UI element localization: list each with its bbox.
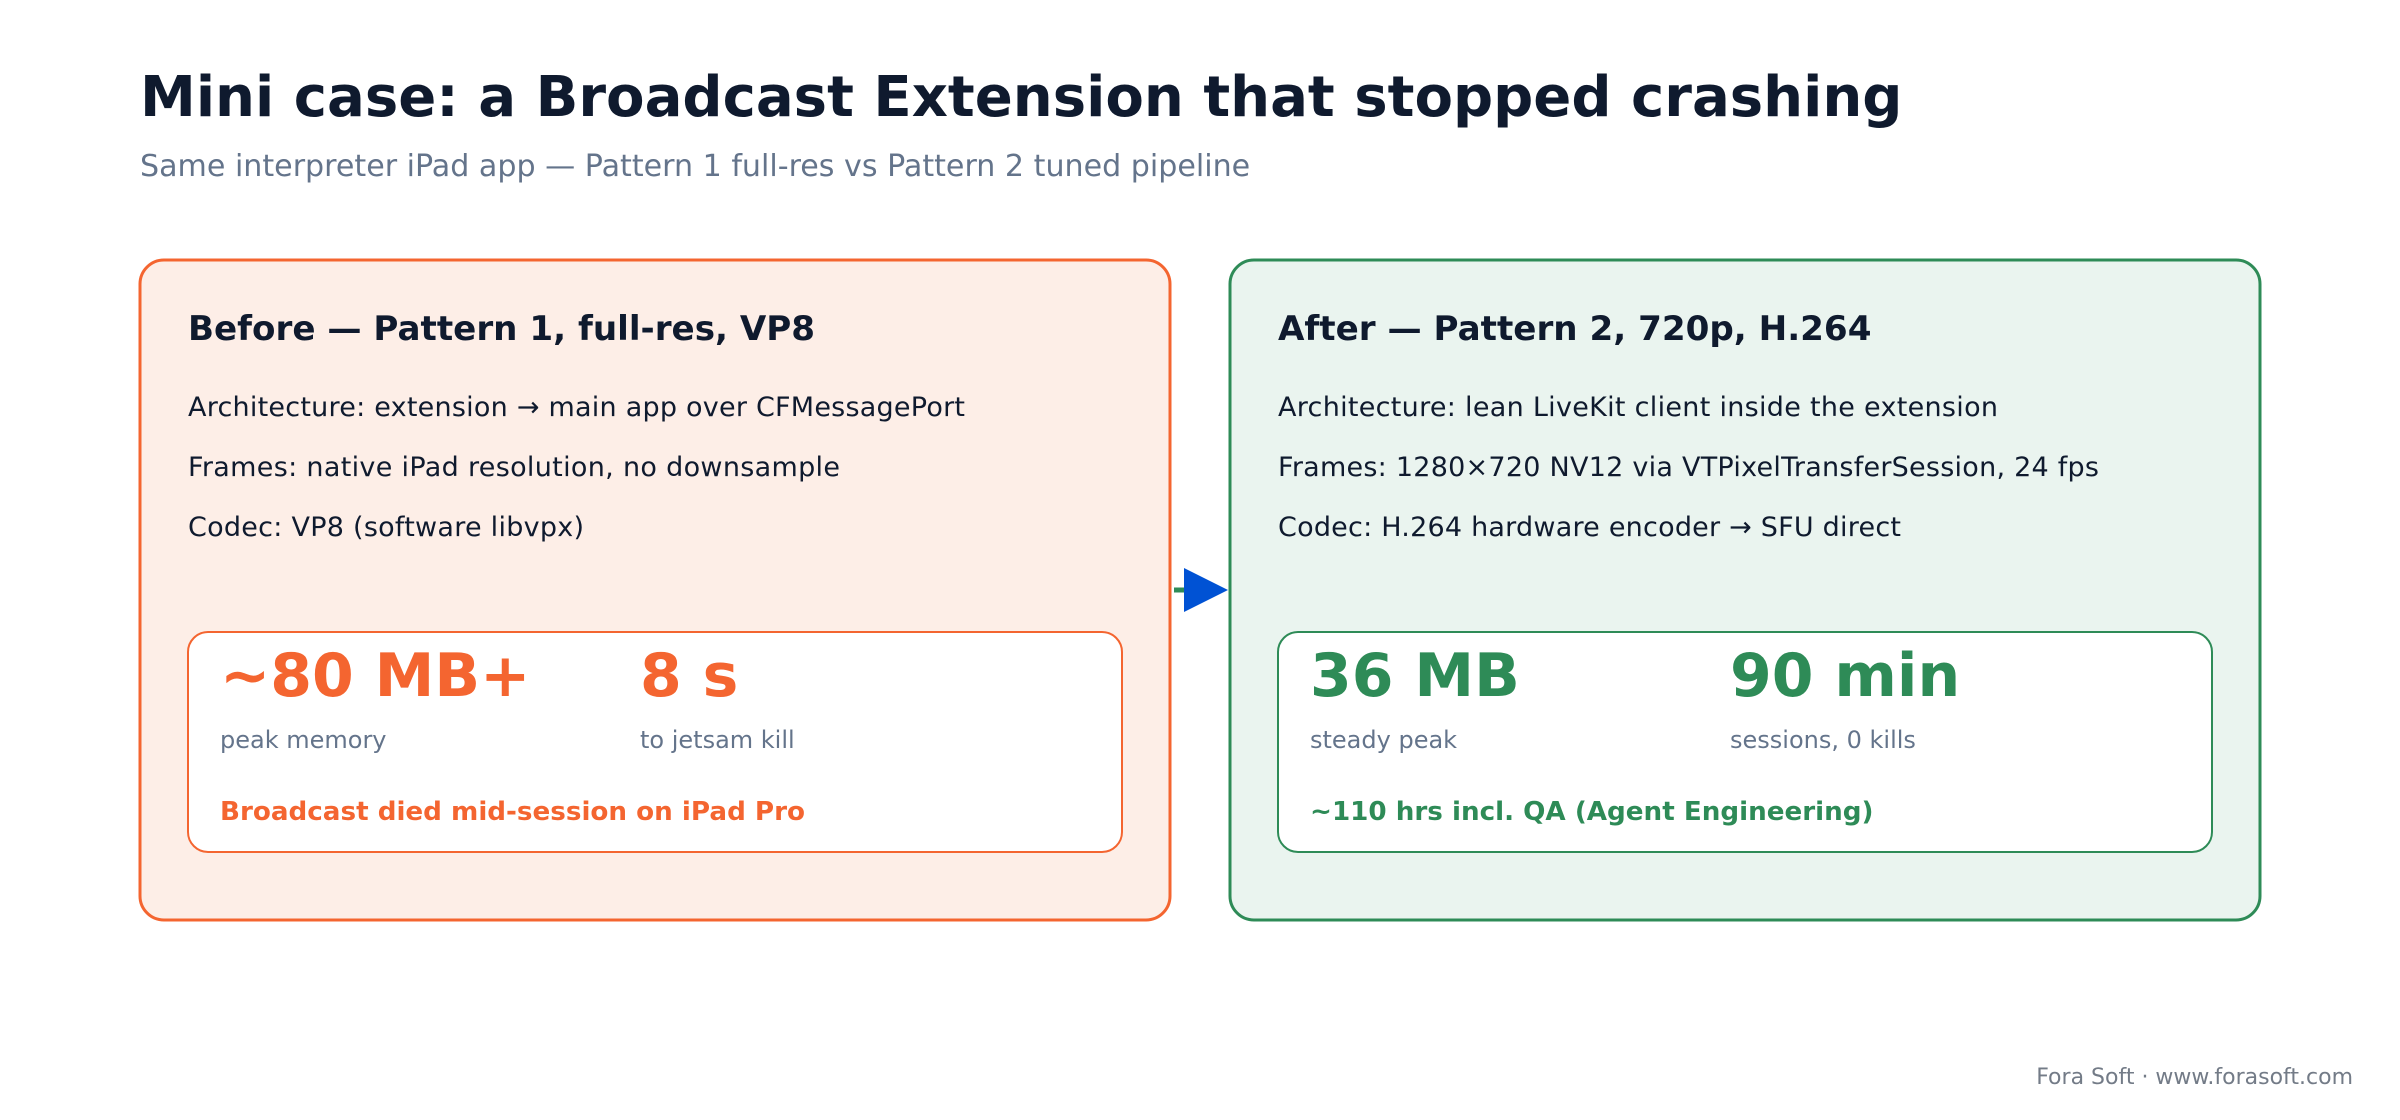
stat: jetsam kill: to jetsam kill: [640, 726, 795, 754]
arrow: before to after: [1174, 568, 1228, 612]
panel: before: [140, 260, 1170, 920]
before details: Frames: native iPad resolution, no downsample: [188, 452, 840, 483]
after outcome: ~110 hrs incl. QA (Agent Engineering): [1310, 797, 1874, 827]
stat: sessions: 90 min: [1730, 641, 1960, 711]
stat: jetsam kill: [640, 641, 795, 754]
after details: Architecture: lean LiveKit client inside the extension: [1278, 392, 1998, 423]
before details: Architecture: extension → main app over CFMessagePort: [188, 392, 965, 423]
stat: sessions: sessions, 0 kills: [1730, 726, 1916, 754]
stat: peak memory: [220, 641, 530, 754]
after results card: [1278, 632, 2212, 852]
stat: peak memory: peak memory: [220, 726, 387, 754]
panel: after: [1230, 260, 2260, 920]
stat: sessions: [1730, 641, 1960, 754]
stat: peak memory: ~80 MB+: [220, 641, 530, 711]
before details: Codec: VP8 (software libvpx): [188, 512, 584, 543]
stat: steady peak: steady peak: [1310, 726, 1457, 754]
before details: [188, 392, 965, 543]
before heading: Before — Pattern 1, full-res, VP8: [188, 309, 815, 349]
stat: steady peak: 36 MB: [1310, 641, 1520, 711]
before outcome: Broadcast died mid-session on iPad Pro: [220, 797, 805, 827]
stat: jetsam kill: 8 s: [640, 641, 738, 711]
footer credit: Fora Soft · www.forasoft.com: [2036, 1065, 2353, 1090]
before results card: [188, 632, 1122, 852]
after details: Codec: H.264 hardware encoder → SFU direct: [1278, 512, 1901, 543]
subtitle: Same interpreter iPad app — Pattern 1 full-res vs Pattern 2 tuned pipeline: [140, 149, 1250, 184]
after details: Frames: 1280×720 NV12 via VTPixelTransferSession, 24 fps: [1278, 452, 2099, 483]
after heading: After — Pattern 2, 720p, H.264: [1278, 309, 1871, 349]
title: Mini case: a Broadcast Extension that stopped crashing: [140, 65, 1902, 130]
stat: steady peak: [1310, 641, 1520, 754]
after details: [1278, 392, 2099, 543]
